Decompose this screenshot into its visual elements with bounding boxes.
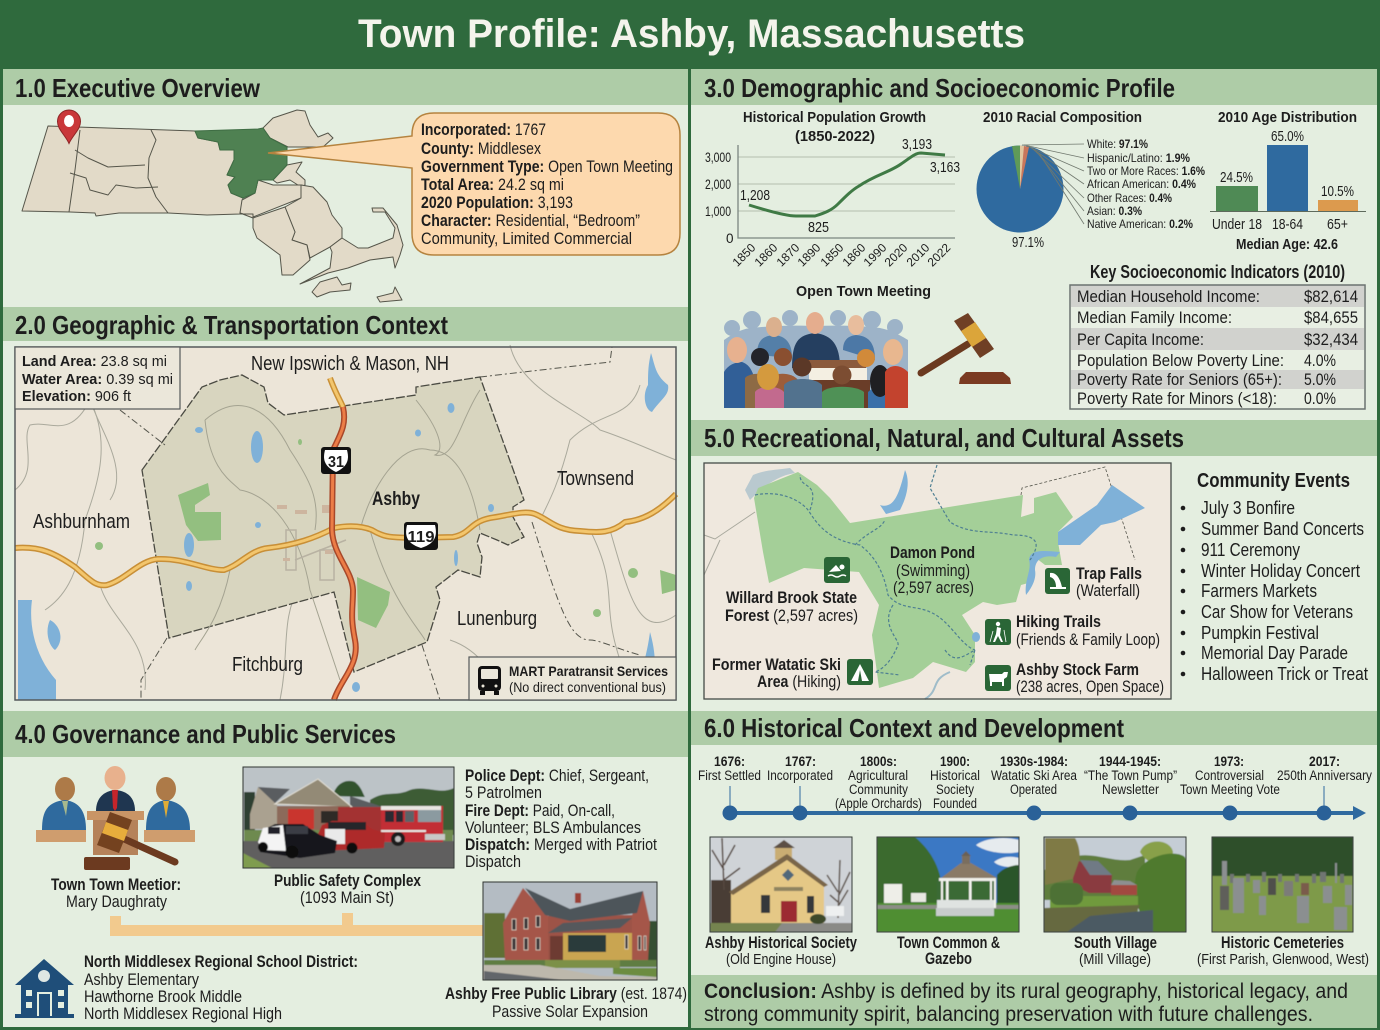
pie chart: racial composition: 2010 Racial Composition [983, 109, 1142, 126]
text labels: recreation sites: (238 acres, Open Space) [1016, 678, 1164, 696]
table: key socioeconomic indicators: Median Household Income: [1077, 287, 1260, 306]
text labels: recreation sites: (2,597 acres) [893, 579, 974, 597]
list: community events [1181, 470, 1368, 684]
line chart: historical population growth: Historical Population Growth [743, 109, 926, 126]
icon: gavel [921, 313, 1011, 384]
callout: town facts: Total Area: 24.2 sq mi [421, 176, 564, 194]
photo: public library [483, 882, 657, 980]
timeline: town history: 1900: [940, 753, 970, 769]
table: key socioeconomic indicators [1070, 262, 1365, 409]
water bodies [18, 353, 668, 700]
caption: historical society: (Old Engine House) [726, 951, 836, 968]
list: community events: July 3 Bonfire [1201, 498, 1295, 518]
pie chart: racial composition: Asian: 0.3% [1087, 204, 1142, 218]
timeline: town history: 1676: [714, 753, 745, 769]
line chart: historical population growth: 1860 [752, 240, 781, 269]
icon: school building [15, 959, 74, 1018]
timeline: town history: Newsletter [1102, 782, 1159, 797]
timeline: town history: (Apple Orchards) [835, 796, 922, 811]
line chart: historical population growth: 1,208 [740, 188, 770, 204]
caption: public library [445, 985, 687, 1021]
heading: 2.0 Geographic and Transportation Context [3, 307, 688, 341]
line chart: historical population growth: 3,000 [705, 150, 731, 165]
line chart: historical population growth: 2,000 [705, 177, 731, 192]
town labels: Ashburnham [33, 511, 130, 533]
bar chart: age distribution: 65.0% [1271, 129, 1304, 145]
pie chart: racial composition: Native American: 0.2% [1087, 217, 1193, 231]
icon: waterfall [1045, 568, 1070, 594]
table: key socioeconomic indicators: 4.0% [1304, 351, 1336, 370]
icon: bus [478, 666, 501, 695]
pie chart: racial composition: Hispanic/Latino: 1.9% [1087, 151, 1190, 165]
timeline: town history: Community [849, 782, 908, 797]
illustration: open town meeting: Open Town Meeting [796, 283, 931, 300]
red SUV [318, 821, 385, 851]
text: school district: North Middlesex Regional School District: [84, 953, 358, 971]
bar chart: age distribution: 24.5% [1220, 170, 1253, 186]
text labels: recreation sites: Trap Falls [1076, 565, 1142, 583]
timeline: town history: 1930s-1984: [1000, 753, 1068, 769]
caption: town meeting: Town Town Meetior: [51, 876, 181, 894]
line chart: historical population growth: 2010 [904, 240, 933, 269]
town labels: Fitchburg [232, 654, 303, 676]
timeline: town history: Controversial [1195, 768, 1264, 783]
illustration: open town meeting [724, 283, 931, 408]
icon: town officials with gavel [36, 766, 195, 870]
text labels: recreation sites: Ashby Stock Farm [1016, 661, 1139, 679]
text labels: recreation sites: Willard Brook State [726, 589, 857, 607]
title banner: Town Profile: Ashby, Massachusetts [358, 12, 1025, 56]
timeline: town history: Incorporated [767, 768, 833, 783]
pie chart: racial composition: Two or More Races: 1.6% [1087, 164, 1205, 178]
line chart: historical population growth: 3,163 [930, 160, 960, 176]
town centre streets [286, 530, 346, 580]
transit box [469, 657, 676, 700]
table: key socioeconomic indicators: $82,614 [1304, 287, 1358, 306]
table: key socioeconomic indicators: Poverty Rate for Minors (<18): [1077, 389, 1277, 408]
transit box: (No direct conventional bus) [509, 679, 666, 695]
caption: south village: (Mill Village) [1079, 951, 1151, 968]
text labels: recreation sites: Damon Pond [890, 544, 975, 562]
caption: south village: South Village [1074, 934, 1157, 952]
heading: 4.0 Governance and Public Services: 4.0 Governance and Public Services [15, 719, 396, 749]
caption: town common: Town Common & [897, 934, 1000, 952]
text labels: recreation sites: Forest (2,597 acres) [725, 607, 858, 625]
heading: 1.0 Executive Overview: 1.0 Executive Overview [15, 73, 261, 103]
callout: town facts: Incorporated: 1767 [421, 121, 546, 139]
text labels: recreation sites [712, 544, 1164, 696]
heading: 2.0 Geographic and Transportation Context: 2.0 Geographic & Transportation Context [15, 310, 448, 340]
callout: town facts: 2020 Population: 3,193 [421, 194, 573, 212]
callout: town facts: Community, Limited Commercial [421, 230, 632, 248]
pie chart: racial composition: 97.1% [1012, 235, 1044, 251]
callout: town facts [268, 113, 680, 255]
heading: 3.0 Demographic and Socioeconomic Profile [691, 69, 1377, 105]
line chart: historical population growth: 1890 [795, 240, 824, 269]
text: public safety services: Fire Dept: Paid, On-call, [465, 802, 615, 820]
shield: route 119: 119 [408, 529, 435, 546]
Ashby town boundary [142, 375, 524, 672]
text labels: recreation sites: (Swimming) [896, 562, 970, 580]
text: public safety services: Police Dept: Chief, Sergeant, [465, 767, 649, 785]
icon: location pin [58, 110, 80, 144]
bar chart: age distribution: 2010 Age Distribution [1218, 109, 1357, 126]
table: key socioeconomic indicators: 0.0% [1304, 389, 1336, 408]
photo: public safety complex [243, 767, 454, 868]
icon: ski mountain [847, 659, 873, 685]
photo: south village mill [1044, 837, 1186, 932]
police cruiser [258, 824, 337, 858]
town labels [33, 353, 634, 676]
caption: public safety complex: (1093 Main St) [300, 889, 394, 907]
heading: 5.0 Recreational, Natural, and Cultural Assets: 5.0 Recreational, Natural, and Cultural Assets [704, 423, 1184, 453]
heading: 5.0 Recreational, Natural, and Cultural Assets [691, 420, 1377, 456]
title banner [0, 0, 1380, 69]
town labels: Ashby [372, 489, 420, 510]
heading: 1.0 Executive Overview [3, 69, 688, 105]
land and elevation box: Elevation: 906 ft [22, 388, 132, 405]
transit box: MART Paratransit Services [509, 663, 668, 679]
list: community events: Farmers Markets [1201, 581, 1317, 601]
caption: town common: Gazebo [925, 950, 972, 968]
timeline: town history: Historical [930, 768, 980, 783]
table: key socioeconomic indicators: $84,655 [1304, 308, 1358, 327]
list: community events: 911 Ceremony [1201, 540, 1300, 560]
text labels: recreation sites: (Waterfall) [1076, 582, 1140, 600]
line chart: historical population growth: 825 [808, 220, 829, 236]
timeline: town history: Founded [933, 796, 977, 811]
text: school district: North Middlesex Regional High [84, 1005, 282, 1023]
icon: hiker [985, 619, 1011, 645]
line chart: historical population growth: 1860 [840, 240, 869, 269]
road: Route 119 [15, 494, 676, 585]
pie chart: racial composition: Other Races: 0.4% [1087, 191, 1172, 205]
table: key socioeconomic indicators: $32,434 [1304, 330, 1358, 349]
map: recreation and conservation land [704, 463, 1171, 699]
heading: 3.0 Demographic and Socioeconomic Profile: 3.0 Demographic and Socioeconomic Profile [704, 73, 1175, 103]
text: public safety services: Dispatch [465, 853, 521, 871]
table: key socioeconomic indicators: Per Capita Income: [1077, 330, 1204, 349]
text labels: recreation sites: (Friends & Family Loop) [1016, 631, 1160, 649]
gavel [97, 812, 175, 862]
table: key socioeconomic indicators: Median Family Income: [1077, 308, 1232, 327]
timeline: town history: First Settled [698, 768, 761, 783]
shield: route 119 [404, 522, 438, 550]
caption: town meeting [51, 876, 181, 911]
land and elevation box: Land Area: 23.8 sq mi [22, 353, 167, 370]
line chart: historical population growth: 1,000 [705, 204, 731, 219]
timeline: town history: Operated [1010, 782, 1057, 797]
caption: town common [897, 934, 1000, 968]
line chart: historical population growth: 1870 [774, 240, 803, 269]
photo: town common gazebo [877, 837, 1019, 932]
line chart: historical population growth: 1990 [861, 240, 890, 269]
heading: 6.0 Historical Context and Development [691, 711, 1377, 745]
conclusion banner [691, 975, 1377, 1028]
text: school district: Hawthorne Brook Middle [84, 988, 242, 1006]
bar chart: age distribution: Under 18 [1212, 217, 1262, 233]
table: key socioeconomic indicators: Population Below Poverty Line: [1077, 351, 1284, 370]
pie chart: racial composition: White: 97.1% [1087, 137, 1148, 151]
text: public safety services: Dispatch: Merged with Patriot [465, 836, 657, 854]
caption: public library: Ashby Free Public Library (est. 1874) [445, 985, 687, 1003]
timeline: town history: “The Town Pump” [1084, 768, 1177, 783]
lake and stream [972, 485, 1145, 642]
timeline: town history: 2017: [1309, 753, 1340, 769]
photo: historical society [710, 837, 852, 932]
caption: south village [1074, 934, 1157, 968]
list: community events: Car Show for Veterans [1201, 602, 1353, 622]
conclusion banner: Conclusion: Ashby is defined by its rural geography, historical legacy, and [704, 980, 1348, 1003]
text: public safety services: 5 Patrolmen [465, 784, 542, 802]
bar chart: age distribution: 10.5% [1321, 184, 1354, 200]
caption: public library: Passive Solar Expansion [492, 1003, 648, 1021]
map: Ashby and neighbouring towns [15, 345, 676, 700]
caption: historical society: Ashby Historical Society [705, 934, 858, 952]
town labels: New Ipswich & Mason, NH [251, 353, 449, 375]
text: school district: Ashby Elementary [84, 971, 200, 989]
list: community events: Memorial Day Parade [1201, 643, 1348, 663]
land and elevation box [15, 347, 180, 409]
road: Route 31 [330, 378, 356, 700]
bar chart: age distribution: 65+ [1327, 217, 1348, 233]
line chart: historical population growth [705, 109, 960, 269]
conservation land [95, 439, 676, 628]
shield: route 31: 31 [328, 454, 344, 471]
pie chart: racial composition: African American: 0.4% [1087, 177, 1196, 191]
caption: public safety complex [274, 872, 422, 907]
county: Middlesex highlight [195, 128, 287, 198]
text labels: recreation sites: Hiking Trails [1016, 613, 1101, 631]
line chart: historical population growth: 0 [726, 231, 734, 246]
timeline: town history: Agricultural [848, 768, 908, 783]
bar chart: age distribution: 18-64 [1272, 217, 1303, 233]
heading: 6.0 Historical Context and Development: 6.0 Historical Context and Development [704, 713, 1124, 743]
timeline: town history: Society [936, 782, 974, 797]
line chart: historical population growth: 2022 [925, 240, 954, 269]
table: key socioeconomic indicators: Poverty Rate for Seniors (65+): [1077, 370, 1282, 389]
caption: historical society [705, 934, 858, 968]
map: Massachusetts counties [22, 110, 403, 302]
list: community events: Community Events [1197, 470, 1350, 492]
caption: historic cemeteries [1197, 934, 1369, 968]
line chart: historical population growth: 1850 [818, 240, 847, 269]
callout: town facts: County: Middlesex [421, 140, 542, 158]
shield: route 31 [321, 447, 351, 474]
text labels: recreation sites: Area (Hiking) [757, 673, 841, 691]
forest polygon [754, 472, 1073, 688]
line chart: historical population growth: (1850-2022) [795, 128, 875, 145]
line chart: historical population growth: 2020 [882, 240, 911, 269]
table: key socioeconomic indicators: 5.0% [1304, 370, 1336, 389]
caption: historic cemeteries: Historic Cemeteries [1221, 934, 1344, 952]
town labels: Lunenburg [457, 608, 537, 630]
bar chart: age distribution [1210, 109, 1366, 253]
timeline: town history: Town Meeting Vote [1180, 782, 1280, 797]
icon: farm animal [985, 665, 1011, 691]
bar chart: age distribution: Median Age: 42.6 [1236, 236, 1338, 253]
text: public safety services: Volunteer; BLS Ambulances [465, 819, 641, 837]
heading: 4.0 Governance and Public Services [3, 711, 688, 757]
photo: historic cemeteries [1212, 837, 1353, 932]
line chart: historical population growth: 3,193 [902, 137, 932, 153]
timeline: town history: 1973: [1214, 753, 1244, 769]
text: school district [84, 953, 358, 1023]
connector: services bar [110, 913, 484, 936]
fire engine [338, 807, 382, 837]
caption: town meeting: Mary Daughraty [66, 893, 168, 911]
line chart: historical population growth: 1850 [730, 240, 759, 269]
timeline: town history: 1800s: [860, 753, 897, 769]
pie chart: racial composition [976, 109, 1205, 251]
timeline: town history: 1944-1945: [1099, 753, 1161, 769]
town labels: Townsend [557, 468, 634, 490]
text: public safety services [465, 767, 657, 871]
timeline: town history: Watatic Ski Area [991, 768, 1077, 783]
caption: public safety complex: Public Safety Complex [274, 872, 422, 890]
land and elevation box: Water Area: 0.39 sq mi [22, 371, 173, 388]
callout: town facts: Government Type: Open Town Meeting [421, 158, 673, 176]
hiking trails [755, 465, 1036, 675]
text labels: recreation sites: Former Watatic Ski [712, 656, 841, 674]
list: community events: Pumpkin Festival [1201, 623, 1319, 643]
conclusion banner: strong community spirit, balancing preservation with future challenges. [704, 1003, 1313, 1026]
callout: town facts: Character: Residential, “Bedroom” [421, 212, 640, 230]
icon: swimming [824, 557, 850, 583]
timeline: town history [698, 753, 1372, 820]
timeline: town history: 1767: [785, 753, 816, 769]
